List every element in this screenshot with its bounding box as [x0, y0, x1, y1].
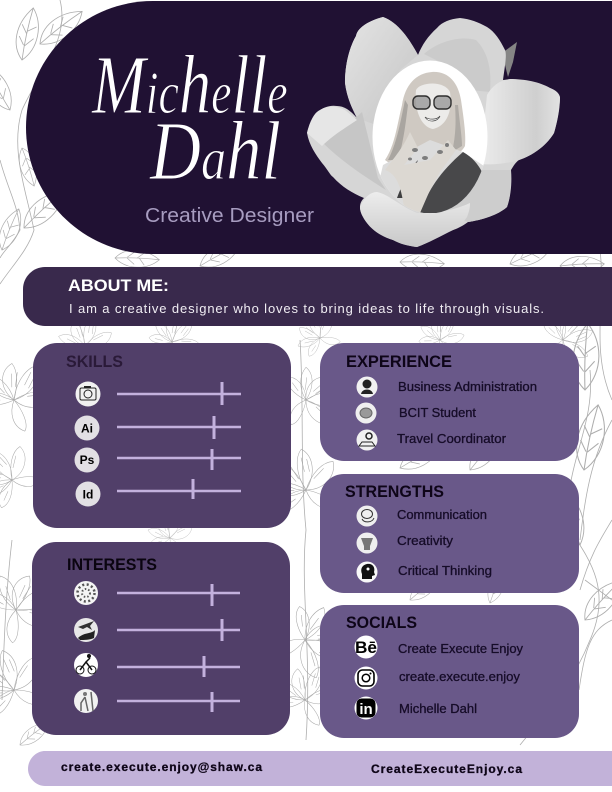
interest bar 3: [117, 656, 240, 677]
portrait: [380, 72, 483, 214]
strengths heading: STRENGTHS: [345, 482, 444, 501]
portrait oval: [372, 60, 488, 214]
social item 1: Create Execute Enjoy: [398, 642, 524, 656]
icon: speech: [356, 506, 378, 526]
panel: interests: [32, 542, 290, 735]
icon: indesign: Id: [83, 488, 93, 502]
strength item 2: Creativity: [397, 534, 454, 548]
socials heading: SOCIALS: [346, 613, 417, 632]
strength item 1: Communication: [397, 508, 487, 522]
icon: photoshop: Ps: [80, 453, 95, 467]
name title: Michelle: [91, 39, 288, 132]
icon: location: [356, 430, 378, 450]
interest bar 4: [117, 692, 240, 712]
interest bar 1: [117, 584, 240, 606]
icon: linkedin: in: [359, 701, 373, 718]
icon: creativity: [356, 532, 378, 554]
subtitle: Creative Designer: [145, 205, 314, 227]
icon: travel: [74, 618, 98, 642]
icon: illustrator: [74, 416, 100, 440]
flower with portrait: [307, 17, 560, 247]
skill bar: photography: [117, 382, 241, 405]
name title: Dahl: [149, 104, 281, 197]
icon: business: [356, 376, 378, 398]
skills heading: SKILLS: [66, 352, 123, 371]
icon: behance: Bē: [355, 638, 377, 657]
skill bar: illustrator: [117, 416, 241, 439]
footer website: CreateExecuteEnjoy.ca: [371, 762, 522, 776]
icon: thinking head: [356, 562, 378, 582]
panel: strengths: [320, 474, 579, 593]
about me heading: ABOUT ME:: [68, 276, 169, 295]
interests heading: INTERESTS: [67, 555, 157, 574]
social item 3: Michelle Dahl: [399, 702, 477, 716]
experience item 1: Business Administration: [398, 380, 537, 394]
panel: socials: [320, 605, 579, 738]
panel: skills: [33, 343, 291, 528]
skill bar: indesign: [117, 479, 241, 499]
icon: photoshop: [74, 448, 100, 472]
flower petals: [307, 17, 560, 247]
icon: instagram: [354, 666, 378, 690]
strength item 3: Critical Thinking: [398, 564, 492, 578]
icon: linkedin: [354, 696, 378, 720]
panel: experience: [320, 343, 579, 461]
experience heading: EXPERIENCE: [346, 352, 452, 371]
icon: cycling: [74, 653, 98, 677]
icon: indesign: [76, 482, 100, 506]
icon: pattern: [74, 581, 98, 605]
social item 2: create.execute.enjoy: [399, 670, 521, 684]
about me bar: [23, 267, 612, 326]
about me text: I am a creative designer who loves to bring ideas to life through visuals.: [69, 301, 544, 316]
icon: illustrator: Ai: [81, 422, 93, 436]
icon: camera: [76, 382, 100, 406]
name title: [91, 39, 288, 197]
footer bar: [28, 751, 612, 786]
icon: hiking: [74, 689, 98, 713]
footer email: create.execute.enjoy@shaw.ca: [61, 760, 262, 774]
header panel: [26, 1, 612, 254]
experience item 3: Travel Coordinator: [397, 432, 506, 446]
skill bar: photoshop: [117, 449, 241, 470]
experience item 2: BCIT Student: [399, 406, 477, 420]
icon: brain: [356, 402, 376, 424]
interest bar 2: [117, 619, 240, 641]
